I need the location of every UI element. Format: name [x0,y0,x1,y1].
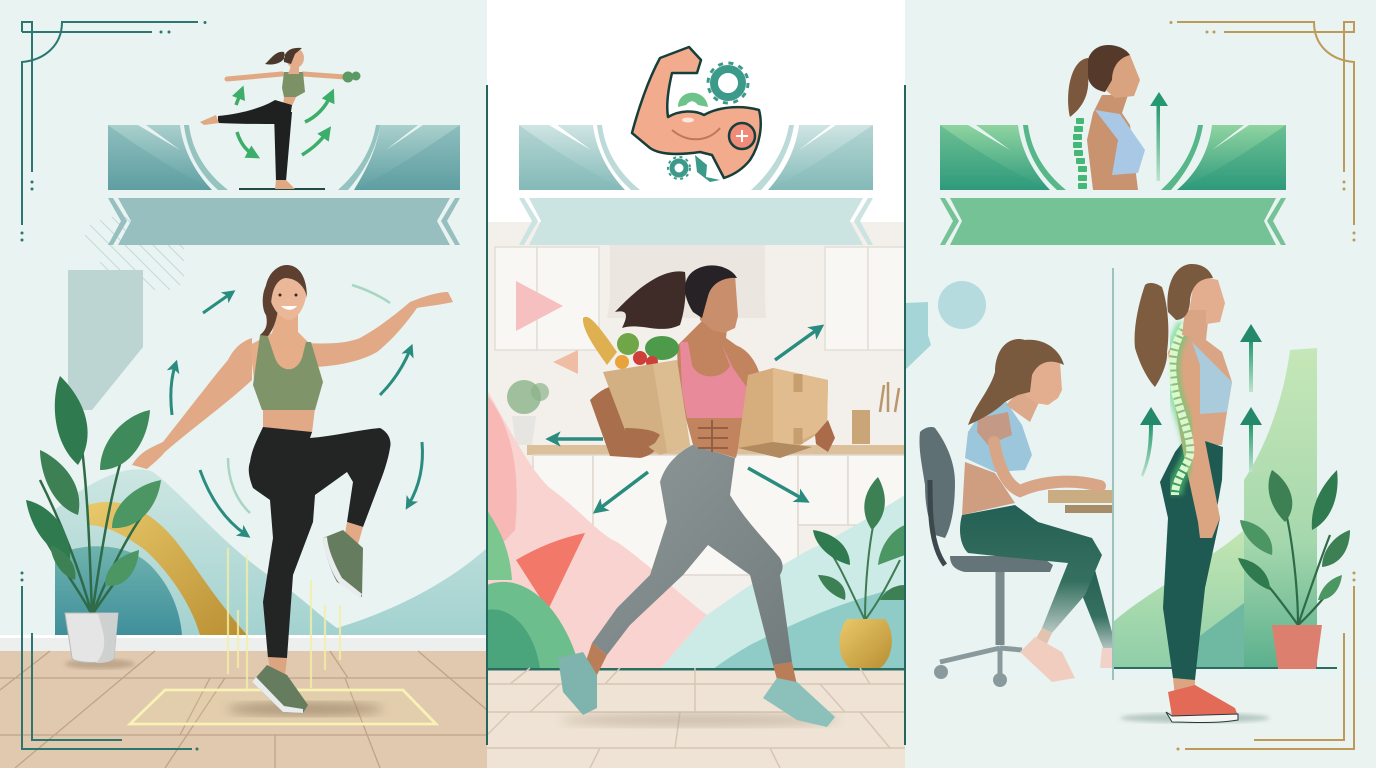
background hatch [85,217,184,290]
figure: woman high knee [132,265,453,713]
chair base [940,648,1022,676]
chair seat [950,556,1053,572]
lower cabinets [533,455,905,575]
green gear [678,93,708,107]
darker wedge [1190,603,1244,668]
arm [994,442,1100,491]
up arrows: posture [1141,342,1253,477]
green arrows [236,92,331,155]
floor [487,668,905,768]
blue top [965,400,1032,472]
ankle [1035,628,1052,648]
eyes [278,294,298,296]
movement arrows [553,329,818,509]
sports top [253,334,323,410]
banner: right heading [940,125,1286,245]
green hills [487,582,580,669]
corner frame: bottom right [1176,572,1356,750]
floor line [1113,667,1337,669]
back glow [1172,325,1190,495]
ponytail [1068,58,1088,117]
far arm over box [735,345,760,378]
torso [1087,95,1138,190]
pink hills [487,390,707,669]
cardboard box [738,368,828,458]
figure: standing woman [1120,264,1270,723]
motion arrows [171,294,422,534]
smile [281,306,297,310]
leggings [1160,440,1223,680]
upper cabinets [495,247,905,350]
torso [1168,322,1232,445]
range hood [607,245,766,318]
gold ribbon [88,502,247,635]
top icon: posture profile [1068,45,1168,190]
background hills [55,469,487,635]
rear shoe [558,652,597,715]
impact lines [228,548,340,690]
divider [1112,268,1114,680]
left arm [132,338,252,469]
hair [1087,45,1130,92]
hand on bag [625,428,660,452]
neck [1182,310,1206,340]
right green hill [1113,530,1244,668]
face [1188,275,1225,325]
leggings [592,445,792,665]
face [698,275,738,333]
spine [1172,325,1190,495]
hair [1167,264,1213,320]
midriff [263,408,315,433]
shin [343,522,363,548]
face [1100,50,1140,98]
desk [1048,490,1112,503]
chair back [919,427,955,538]
torso skin [677,320,757,458]
neck [1006,390,1040,422]
seated shoe [1020,637,1075,682]
pot [65,659,135,669]
far hand [815,420,835,452]
up arrow heads [1140,324,1262,425]
background grey shape [68,270,143,410]
ankle [1173,678,1195,697]
bra [1192,342,1232,414]
kitchen background [487,222,905,672]
dumbbell [342,72,354,82]
top icon: strong arm with gears [632,47,761,182]
ponytail [615,271,686,329]
leggings [249,427,391,658]
pink top [680,342,750,418]
counter [527,445,905,455]
far leg [1070,565,1112,650]
chair column [996,572,1004,645]
up arrow [1156,105,1160,181]
plant: brass pot [813,477,905,668]
produce [583,317,617,365]
hair [968,339,1064,425]
potted herb [507,380,549,445]
accent shape [905,302,931,370]
box tape [794,374,802,444]
top figure: balance pose [200,48,360,189]
hair [685,265,737,318]
badge [729,123,755,149]
panel: functional strength [487,0,905,768]
neck and shoulders [250,312,320,380]
corner frame: top right [1170,21,1356,242]
midriff [962,462,1015,515]
right arm [305,292,453,367]
face [1025,360,1062,405]
gear [714,69,742,97]
shoulder sleeve [977,412,1012,445]
figure: woman carrying [558,265,840,727]
arm [1175,352,1220,538]
dark mat line [239,188,325,190]
plant: terracotta [1238,470,1350,669]
floor marker glow [130,690,436,724]
grocery bag [603,360,690,455]
counter jars [852,410,870,444]
right green column [1244,348,1317,668]
accent triangles [516,281,563,331]
leggings [960,505,1102,633]
corner frame: bottom left [20,572,198,750]
rear ankle [583,643,607,675]
abs lines [698,420,728,452]
ponytail [260,280,278,336]
small gear [672,161,686,175]
bra [1095,110,1145,175]
hair [265,265,307,305]
panel dividers [487,85,905,745]
front ankle [773,662,797,690]
face [268,278,306,320]
accent circle [938,281,986,329]
front shoe [763,678,835,727]
teal hills [660,495,905,669]
ankle [268,657,287,675]
standing shoe [252,665,308,713]
banner: left heading [108,125,460,245]
raised shoe [323,530,363,597]
red hill [516,533,585,610]
figure: seated woman [919,339,1112,687]
shoe [1168,685,1238,716]
far shoe [1100,648,1112,668]
corner frame: top left [20,21,206,242]
plant: left [26,376,161,669]
chair arm link [930,480,945,565]
spine squares [1073,118,1087,189]
panel: balance and coordination [0,0,487,768]
near arm [590,385,660,458]
ponytail [1135,283,1168,387]
panel: posture [905,0,1376,768]
soft motion strokes [228,285,390,513]
wall base and floor [0,635,487,638]
arm [632,47,761,178]
banner: middle heading [519,125,873,245]
